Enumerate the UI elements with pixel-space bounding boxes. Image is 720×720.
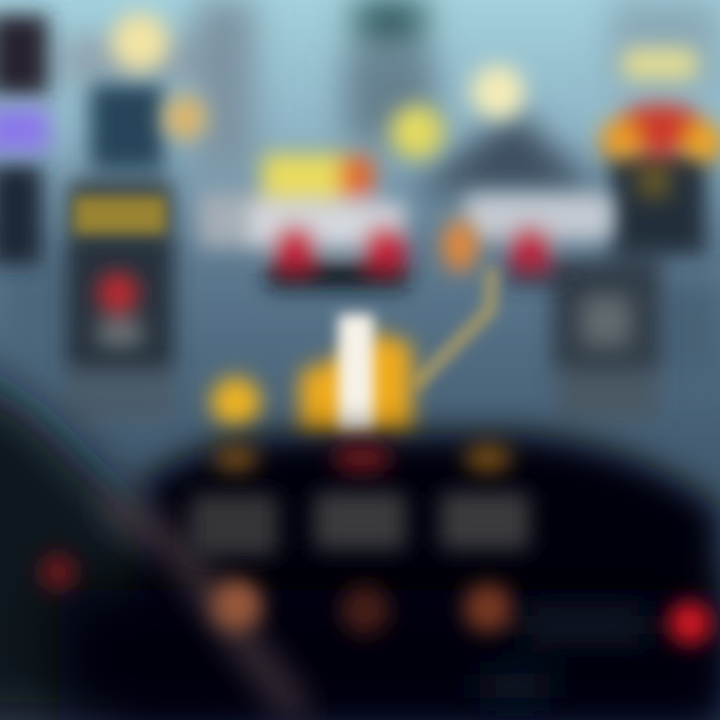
navigation route line [414, 268, 492, 386]
left building column [0, 15, 174, 420]
steering wheel rim [105, 498, 300, 715]
yellow shop sign [74, 196, 166, 234]
dashboard buttons [211, 579, 513, 635]
left dark interior [0, 360, 260, 720]
orange marker between cars [442, 220, 478, 272]
dashboard silhouette [120, 434, 720, 720]
dashboard indicator lights [214, 442, 512, 474]
right building column [552, 150, 706, 420]
red warning lights [40, 554, 712, 645]
background buildings [0, 0, 720, 435]
navigation direction icon [300, 314, 412, 436]
lower right dashboard tint [480, 612, 650, 700]
lead car [198, 154, 408, 288]
white icon bar [338, 314, 374, 436]
yellow waypoint dot [211, 377, 261, 427]
street lights [111, 13, 698, 159]
neon purple sign [0, 108, 49, 152]
orange icon body [300, 332, 412, 436]
lower floor shadow [60, 590, 720, 720]
dashboard screens [190, 492, 530, 556]
orange and red canopy sign [600, 104, 720, 198]
second car [465, 194, 613, 284]
red traffic signal [97, 272, 142, 346]
